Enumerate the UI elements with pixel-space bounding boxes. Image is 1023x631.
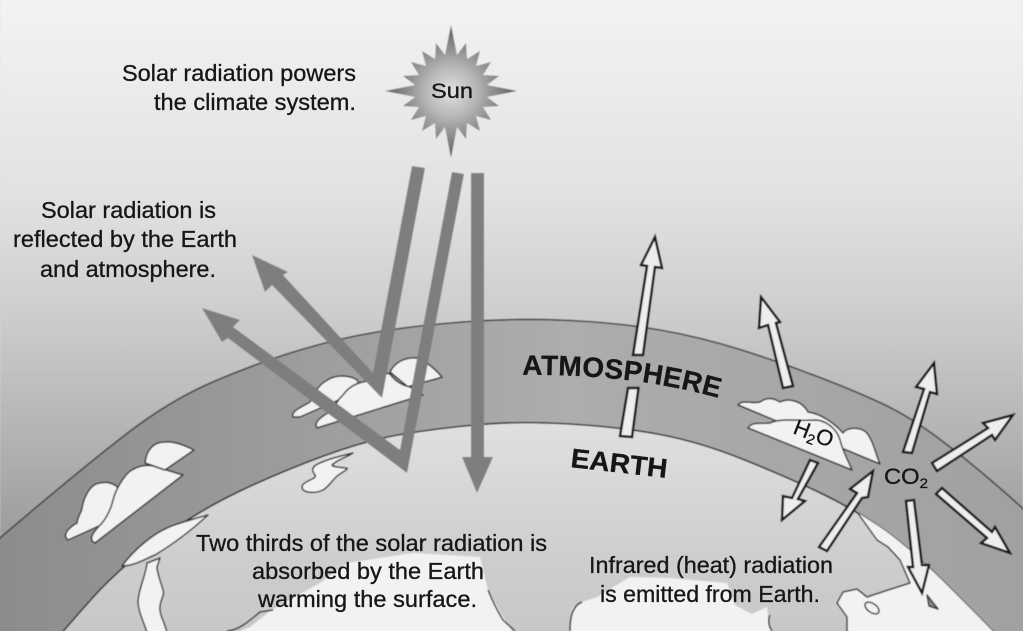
arrow: CO2 up right (932, 415, 1013, 471)
gray reflected ray, cloud (252, 166, 425, 398)
text: two thirds absorbed: absorbed by the Earth (252, 558, 484, 584)
earth surface (40, 423, 1020, 631)
land: left sliver (122, 515, 208, 566)
all labels (13, 60, 928, 612)
gray absorbed ray (462, 173, 493, 493)
cloud: centre front (316, 373, 423, 428)
atmosphere band (0, 319, 1023, 631)
land: left peninsula (138, 558, 167, 631)
sun star (385, 25, 517, 158)
label: H2O: 2 (804, 430, 818, 448)
arrow: CO2 up (903, 363, 937, 453)
text: two thirds absorbed: warming the surface. (257, 586, 477, 612)
clouds centre (293, 358, 442, 428)
arrow: CO2 down right (936, 488, 1010, 553)
label: sun: Sun (431, 80, 473, 103)
cloud: left top (145, 442, 194, 470)
clouds right (738, 399, 880, 470)
arrow: H2O up (759, 297, 793, 388)
arrow: CO2 down (906, 500, 929, 593)
label: H2O: O (812, 423, 837, 452)
text: solar radiation reflected: reflected by the Earth (13, 226, 237, 252)
label: H2O: H (790, 414, 814, 443)
arrow: through atmosphere, upper part (633, 237, 662, 355)
cloud: centre top (390, 358, 442, 387)
land: right continent (836, 514, 994, 631)
label: CO2: 2 (920, 475, 928, 491)
cloud: right front (748, 420, 852, 470)
text: two thirds absorbed (196, 530, 547, 612)
text: solar radiation reflected: Solar radiation is (41, 197, 216, 223)
land: small island (302, 453, 353, 492)
land: bottom middle patch (570, 577, 772, 631)
cloud: left front (91, 465, 183, 543)
landmasses (122, 453, 1023, 631)
gray reflected ray, earth (202, 172, 464, 473)
cloud: centre back (293, 376, 358, 417)
land: bottom middle right coast (769, 615, 772, 631)
white arrows (620, 237, 1013, 593)
land: bottom centre right coast (488, 590, 515, 631)
text: infrared emitted (589, 552, 833, 607)
arrow: through atmosphere, lower part (620, 388, 638, 437)
text: two thirds absorbed: Two thirds of the solar radiation is (196, 530, 547, 556)
arrow: H2O down (782, 460, 818, 520)
label: earth: EARTH (569, 443, 669, 484)
text: infrared emitted: is emitted from Earth. (600, 581, 820, 607)
text: solar radiation powers (122, 60, 356, 115)
text: solar radiation powers: the climate system. (154, 89, 356, 115)
label: atmosphere: ATMOSPHERE (522, 355, 722, 398)
cloud: left back (66, 482, 120, 540)
land: bottom centre (227, 553, 515, 631)
land: bottom middle left coast (570, 602, 582, 631)
text: infrared emitted: Infrared (heat) radiation (589, 552, 833, 578)
land: bottom centre left coast (227, 610, 273, 631)
arrow: into CO2 (819, 471, 873, 551)
text: solar radiation reflected (13, 197, 237, 282)
cloud: right back (738, 399, 880, 464)
clouds left (66, 442, 194, 543)
label: CO2: CO (884, 464, 917, 489)
land: right small lake (863, 600, 881, 616)
text: solar radiation powers: Solar radiation powers (122, 60, 356, 86)
land: right tiny island (927, 595, 938, 609)
text: solar radiation reflected: and atmosphere. (40, 256, 216, 282)
